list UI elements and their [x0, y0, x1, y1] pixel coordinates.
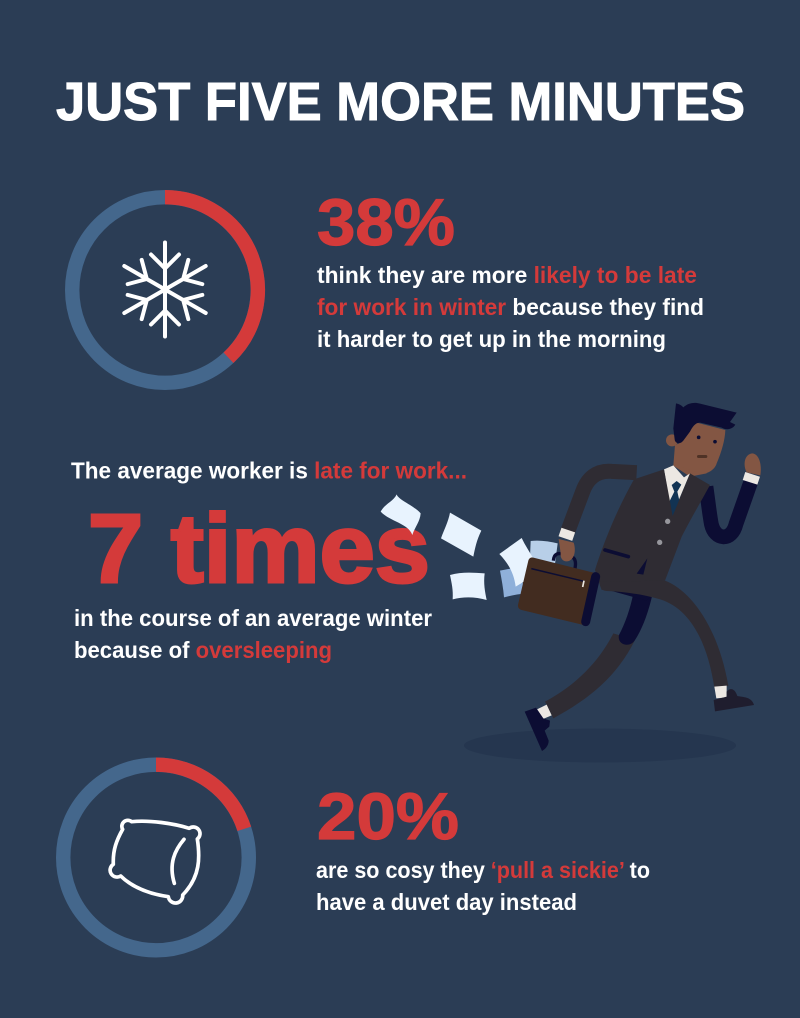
briefcase handle [553, 554, 576, 568]
donut chart: 20% [63, 765, 249, 950]
text block: 38% description: it harder to get up in the morning [317, 326, 666, 352]
back sock and shoe [537, 705, 552, 719]
text block: 20% description [316, 857, 650, 915]
text block: 38% description: think they are more likely to be late [317, 262, 697, 288]
text block: 7 times description: because of oversleeping [74, 637, 332, 663]
donut chart: 38% [72, 197, 258, 383]
front hand [559, 539, 575, 561]
text block: 20% description: have a duvet day instead [316, 889, 577, 915]
briefcase [518, 557, 597, 625]
face [675, 423, 725, 473]
jacket [595, 469, 710, 590]
front sock and shoe [714, 686, 727, 698]
text block: 38% description [317, 262, 704, 352]
hair [673, 403, 737, 443]
jacket pocket, vent and buttons [605, 519, 670, 575]
illustration: running businessman [518, 403, 761, 751]
back hand [745, 453, 761, 475]
text block: intro line: The average worker is late for work... [71, 458, 467, 484]
front leg [600, 581, 728, 688]
back leg [545, 590, 653, 718]
statistic: 38%: 38% [317, 185, 455, 259]
back arm [706, 476, 759, 537]
panel: 38% late in winter [72, 185, 704, 383]
text block: 20% description: are so cosy they ‘pull a sickie’ to [316, 857, 650, 883]
text block: 7 times description [74, 605, 432, 663]
flying papers [381, 494, 558, 600]
statistic: 7 times: 7 times [88, 494, 430, 603]
shirt collar and tie [664, 465, 690, 505]
icon: pillow [110, 820, 200, 903]
neck and ear [673, 440, 707, 477]
icon: snowflake [117, 242, 213, 336]
title: JUST FIVE MORE MINUTES [56, 72, 745, 132]
eyes and mouth [697, 435, 700, 439]
panel: 20% duvet day [63, 765, 650, 950]
front arm [560, 471, 637, 537]
ground shadow [464, 728, 736, 762]
statistic: 20%: 20% [317, 779, 459, 853]
panel: 7 times late [71, 458, 467, 663]
text block: 38% description: for work in winter because they find [317, 294, 704, 320]
text block: 7 times description: in the course of an average winter [74, 605, 432, 631]
